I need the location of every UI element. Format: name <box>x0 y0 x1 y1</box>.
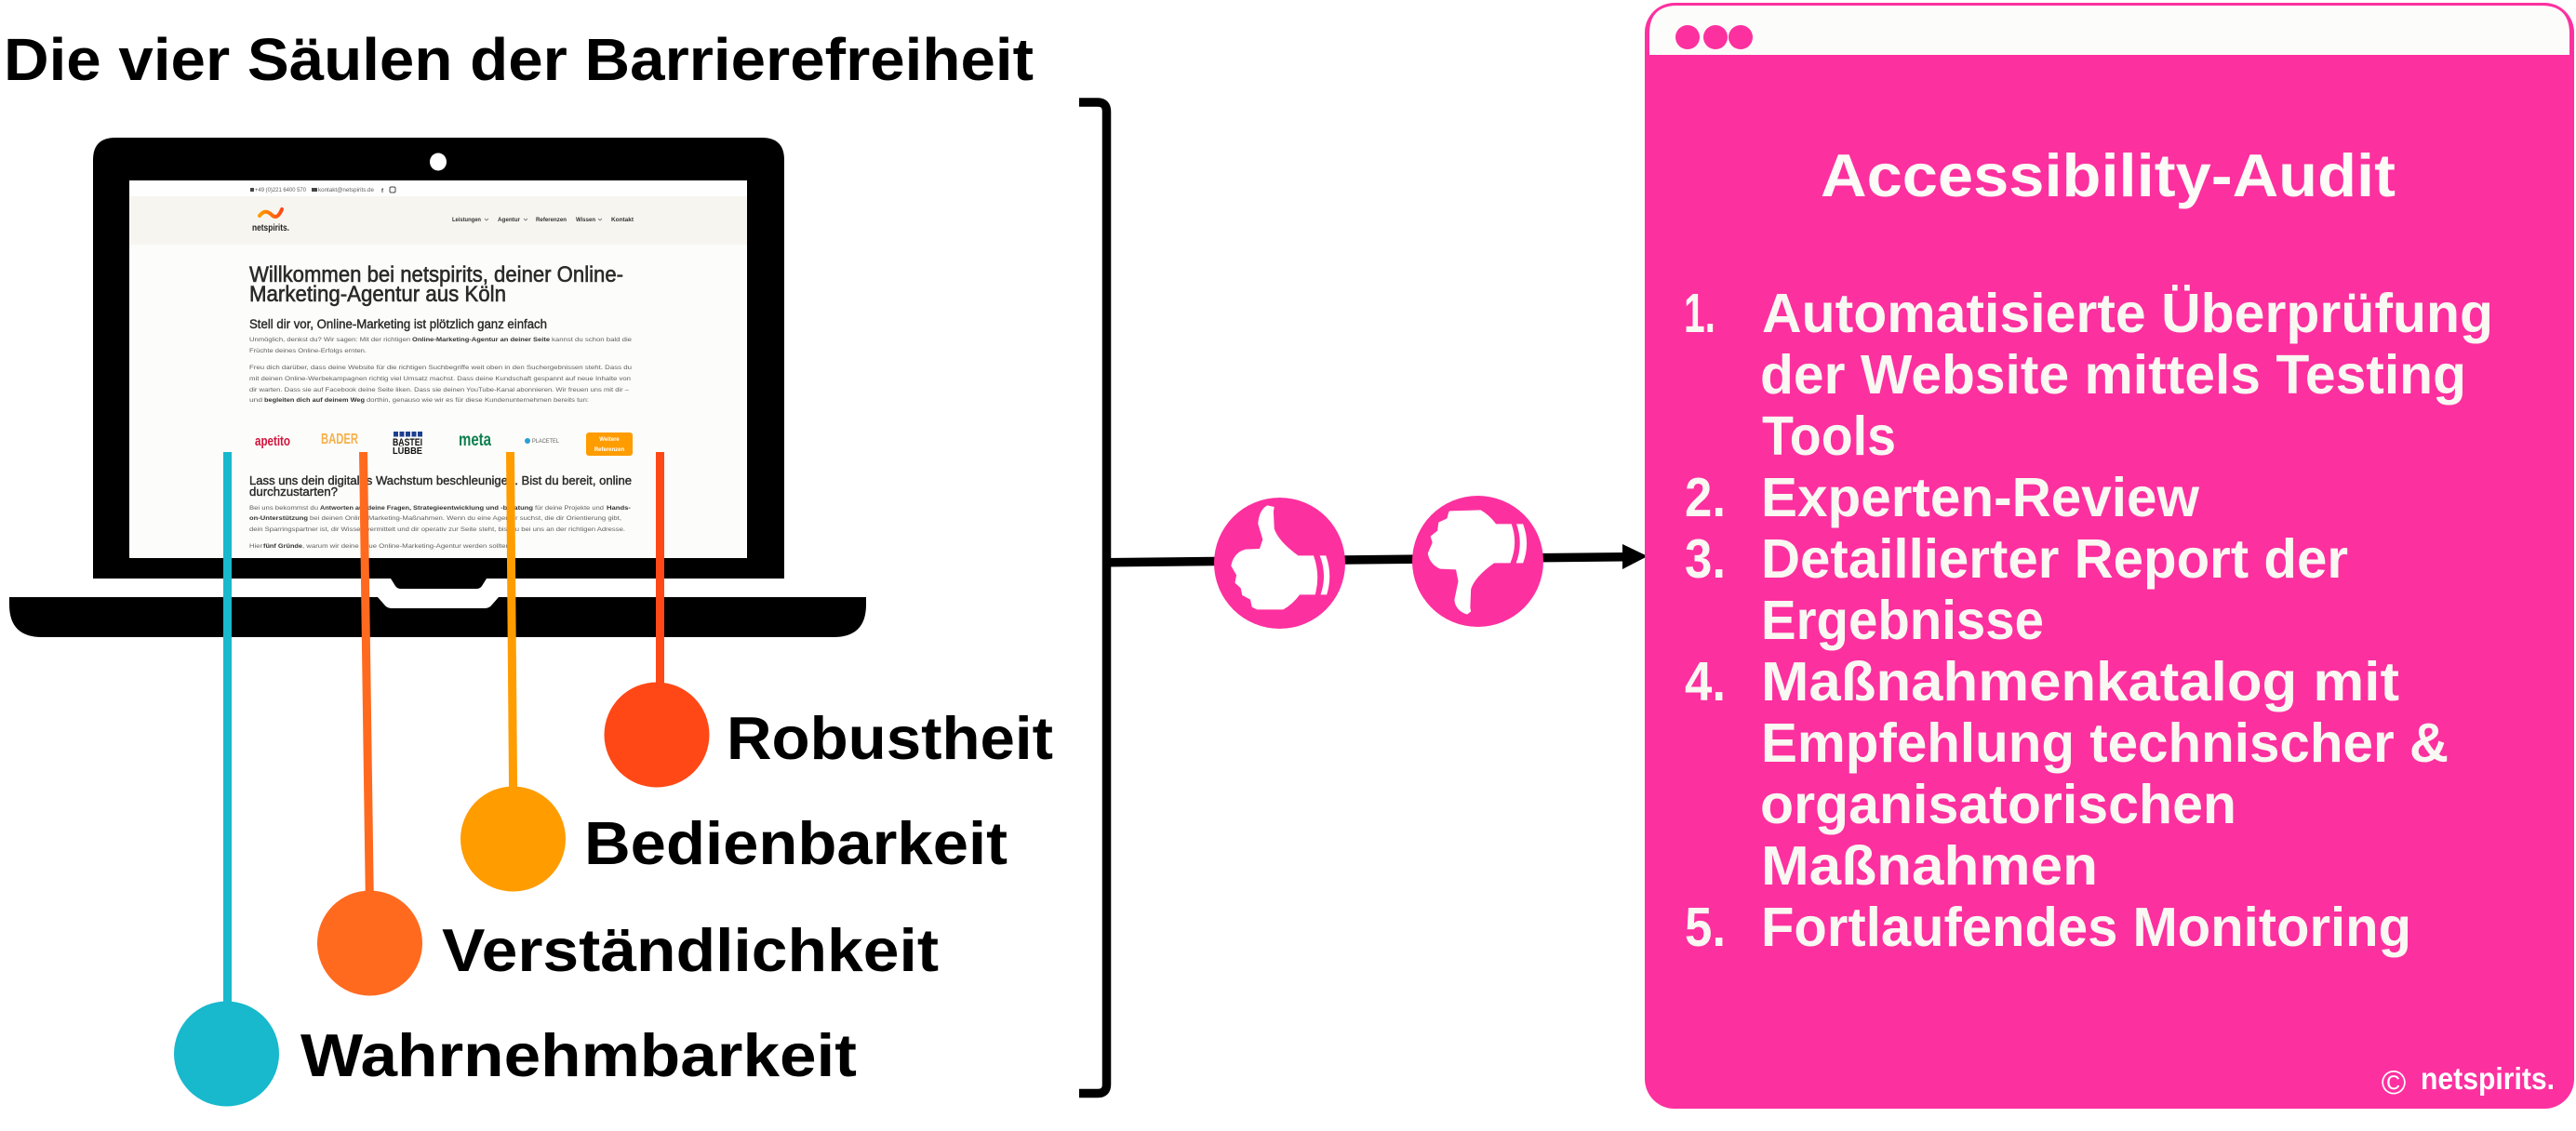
customer logos <box>255 431 560 457</box>
icon: thumbs down <box>1412 496 1543 627</box>
bracket <box>1079 102 1107 1094</box>
screenshot lower text <box>249 506 631 550</box>
screenshot lower text: Hier <box>249 544 262 550</box>
screenshot intro text: dorthin, genauso wie wir es für diese Kundenunternehmen bereits tun: <box>367 398 589 404</box>
window dots <box>1675 25 1753 49</box>
navigation: Kontakt <box>611 218 634 223</box>
panel: Accessibility-Audit browser window <box>1645 3 2574 1109</box>
screenshot intro text: Früchte deines Online-Erfolgs ernten. <box>249 349 367 354</box>
numbered list: Detaillierter Report der <box>1761 528 2348 590</box>
numbered list: Fortlaufendes Monitoring <box>1761 897 2411 958</box>
laptop lid <box>93 138 784 589</box>
pillar: Robustheit <box>605 452 1053 787</box>
customer logos: PLACETEL <box>532 439 560 445</box>
navigation <box>452 218 634 223</box>
screenshot second heading: durchzustarten? <box>249 485 338 499</box>
copyright note: netspirits. <box>2421 1061 2555 1096</box>
numbered list: organisatorischen <box>1760 774 2236 835</box>
screenshot lower text: Strategieentwicklung und -beratung <box>413 506 533 512</box>
webcam <box>430 153 447 171</box>
pillar: Verständlichkeit <box>317 452 939 995</box>
netspirits logo: netspirits. <box>252 223 289 233</box>
top contact bar <box>250 187 395 194</box>
screenshot second heading: Lass uns dein digitales Wachstum beschleunigen. Bist du bereit, online <box>249 473 632 487</box>
screenshot lower text: on-Unterstützung <box>249 516 308 522</box>
top contact bar: +49 (0)221 6400 570 <box>255 188 307 193</box>
numbered list: Ergebnisse <box>1761 590 2044 651</box>
customer logos: BASTEI <box>393 437 422 448</box>
pillar: Bedienbarkeit <box>460 452 1008 891</box>
navigation: Agentur <box>498 218 521 223</box>
button: weitere Referenzen <box>586 432 633 456</box>
screenshot headline: Willkommen bei netspirits, deiner Online- <box>249 262 623 287</box>
screenshot lower text: fünf Gründe <box>263 544 303 550</box>
laptop base <box>9 597 866 637</box>
screenshot lower text: Bei uns bekommst du <box>249 506 318 512</box>
screenshot intro text: begleiten dich auf deinem Weg <box>264 398 365 404</box>
numbered list: Automatisierte Überprüfung <box>1762 283 2493 344</box>
screenshot intro text: und <box>249 398 262 404</box>
pillar: Verständlichkeit: Verständlichkeit <box>442 916 939 984</box>
button: weitere Referenzen: Weitere <box>599 437 620 443</box>
screenshot lower text: dein Sparringspartner ist, dir Wissen vermittelt und dir operativ zur Seite steht, bist du bei uns an der richtigen Adresse. <box>249 527 625 533</box>
screenshot intro text: dir warten. Dass sie auf Facebook deine Seite liken. Dass sie deinen YouTube-Kanal abonnieren. Wir freuen uns mit dir – <box>249 388 630 393</box>
navigation: Wissen <box>576 218 595 223</box>
screenshot intro text: Freu dich darüber, dass deine Website für die richtigen Suchbegriffe weit oben in den Suchergebnissen steht. Dass du <box>249 366 632 371</box>
numbered list: Tools <box>1762 406 1896 467</box>
screenshot intro text: Online-Marketing-Agentur an deiner Seite <box>412 338 551 343</box>
customer logos: LÜBBE <box>393 445 422 457</box>
top contact bar: kontakt@netspirits.de <box>318 188 375 193</box>
numbered list: 4. <box>1685 651 1726 712</box>
button: weitere Referenzen: Referenzen <box>594 447 625 453</box>
screenshot lower text: , warum wir deine neue Online-Marketing-Agentur werden sollten: <box>302 544 512 550</box>
customer logos: apetito <box>255 433 290 449</box>
laptop illustration <box>9 138 866 637</box>
icon: thumbs up <box>1214 498 1345 629</box>
screenshot lower text: für deine Projekte und <box>535 506 604 512</box>
customer logos: meta <box>459 431 491 450</box>
numbered list: 5. <box>1685 897 1726 958</box>
numbered list: 3. <box>1685 528 1726 590</box>
navigation: Referenzen <box>536 218 567 223</box>
screenshot lower text: bei deinen Online-Marketing-Maßnahmen. Wenn du eine Agentur suchst, die dir Orientierung gibt, <box>310 516 621 522</box>
screenshot headline: Marketing-Agentur aus Köln <box>249 282 506 307</box>
screenshot intro text: kannst du schon bald die <box>552 338 633 343</box>
pillar: Wahrnehmbarkeit <box>174 452 857 1107</box>
numbered list: 2. <box>1685 467 1726 528</box>
numbered list: Maßnahmen <box>1761 835 2098 897</box>
screenshot second heading <box>249 473 632 499</box>
numbered list: der Website mittels Testing <box>1760 344 2466 406</box>
navigation: Leistungen <box>452 218 481 223</box>
copyright note: © <box>2382 1063 2406 1101</box>
pillar: Wahrnehmbarkeit: Wahrnehmbarkeit <box>300 1021 857 1089</box>
panel heading: Accessibility-Audit <box>1821 141 2396 209</box>
screenshot intro text: Unmöglich, denkst du? Wir sagen: Mit der richtigen <box>249 338 410 343</box>
pillar: Robustheit: Robustheit <box>727 704 1053 772</box>
pillar: Bedienbarkeit: Bedienbarkeit <box>584 809 1008 877</box>
website screenshot <box>129 180 747 558</box>
title: Die vier Säulen der Barrierefreiheit <box>4 26 1034 93</box>
numbered list: Maßnahmenkatalog mit <box>1761 651 2399 712</box>
screenshot lower text: Antworten auf deine Fragen, <box>320 506 411 512</box>
copyright note <box>2382 1061 2555 1101</box>
numbered list: Empfehlung technischer & <box>1761 712 2449 774</box>
screenshot headline <box>249 262 623 331</box>
screenshot intro text: mit deinen Online-Werbekampagnen richtig viel Umsatz machst. Dass deine Kundschaft gespannt auf neue Inhalte von <box>249 377 631 382</box>
screenshot headline: Stell dir vor, Online-Marketing ist plötzlich ganz einfach <box>249 317 547 331</box>
numbered list <box>1684 283 2493 958</box>
customer logos: BADER <box>321 432 358 447</box>
numbered list: Experten-Review <box>1761 467 2199 528</box>
screenshot lower text: Hands- <box>607 506 631 512</box>
screenshot intro text <box>249 338 633 404</box>
netspirits logo <box>252 209 289 233</box>
arrow <box>1107 544 1648 569</box>
numbered list: 1. <box>1684 283 1715 344</box>
browser title bar <box>1649 6 2569 55</box>
top contact bar: f <box>381 189 384 194</box>
